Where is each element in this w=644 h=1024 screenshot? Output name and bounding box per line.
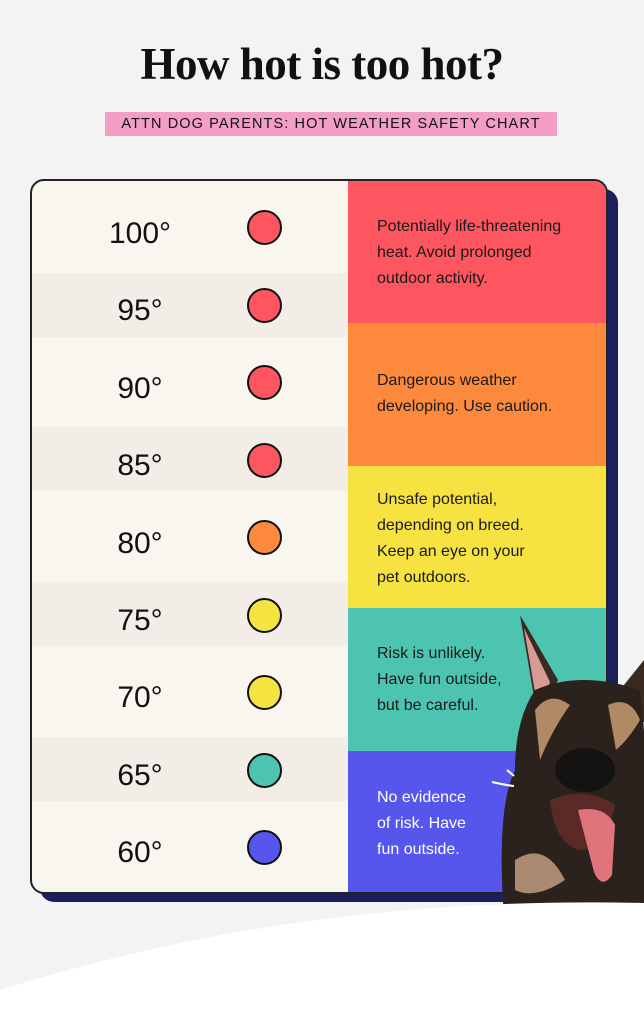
temperatures: 100°: [109, 217, 171, 250]
chart card: pet outdoors.: [377, 569, 470, 586]
chart card: 95°: [117, 294, 163, 327]
chart card: of risk. Have: [377, 815, 466, 832]
block: blue: [348, 751, 610, 896]
chart card: Risk is unlikely.: [377, 645, 485, 662]
chart card: 65°: [117, 759, 163, 792]
chart card: 80°: [117, 527, 163, 560]
descriptions: heat. Avoid prolonged: [377, 244, 532, 261]
indicator dots: [247, 210, 282, 245]
chart card: but be careful.: [377, 697, 478, 714]
chart card: 60°: [117, 836, 163, 869]
dog illustration: [492, 615, 644, 904]
card shadow: [40, 189, 618, 902]
chart card: 75°: [117, 604, 163, 637]
chart card: 85°: [117, 449, 163, 482]
subtitle banner: [105, 112, 557, 136]
block: orange: [348, 323, 610, 466]
chart card: Dangerous weather: [377, 372, 517, 389]
chart card: Unsafe potential,: [377, 491, 497, 508]
chart card: fun outside.: [377, 841, 460, 858]
chart card: depending on breed.: [377, 517, 524, 534]
chart card: 90°: [117, 372, 163, 405]
chart card: No evidence: [377, 789, 466, 806]
block: yellow: [348, 466, 610, 609]
block: red: [348, 181, 610, 324]
chart card: Keep an eye on your: [377, 543, 525, 560]
chart card: 70°: [117, 681, 163, 714]
descriptions: Potentially life-threatening: [377, 218, 561, 235]
descriptions: outdoor activity.: [377, 270, 488, 287]
subtitle banner: ATTN DOG PARENTS: HOT WEATHER SAFETY CHART: [121, 116, 541, 132]
descriptions: [377, 218, 561, 287]
title: How hot is too hot?: [140, 39, 504, 89]
chart card: Have fun outside,: [377, 671, 502, 688]
chart card: [30, 179, 608, 894]
block: teal: [348, 608, 610, 751]
bottom wave: [0, 902, 644, 1024]
chart card: developing. Use caution.: [377, 398, 552, 415]
